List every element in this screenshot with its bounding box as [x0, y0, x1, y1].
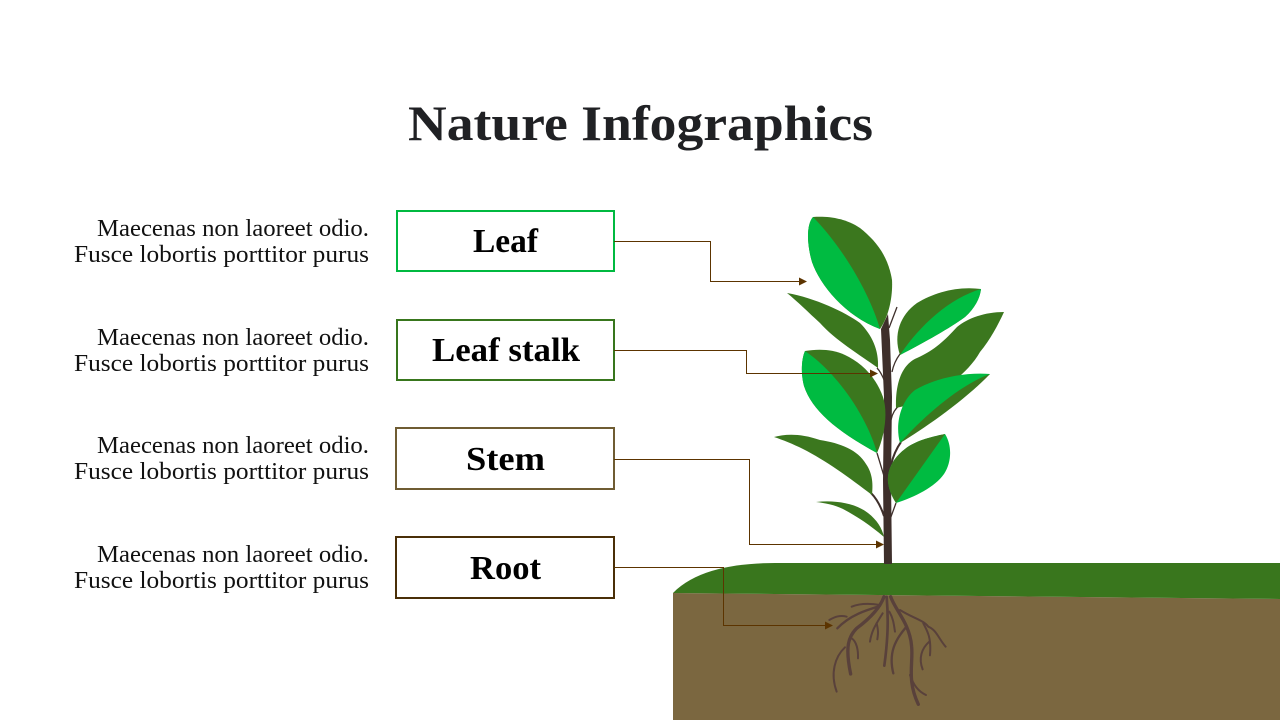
ground: soil and grass: [673, 563, 1280, 720]
text block: leaf: [74, 216, 369, 268]
leaf: middle right: [898, 374, 990, 443]
text block: root: [74, 542, 369, 594]
connector arrow: leaf stalk: [614, 350, 878, 378]
text block: stem: [74, 433, 369, 485]
leaf: middle left: [802, 350, 885, 453]
label box: root: Root: [470, 550, 542, 587]
label box: stem: Stem: [466, 441, 545, 478]
leaf: upper left dark: [787, 293, 878, 368]
text block: stem: Fusce lobortis porttitor purus: [74, 459, 369, 485]
connector arrow: root: [614, 568, 833, 630]
text block: leaf: Maecenas non laoreet odio.: [97, 216, 369, 242]
text block: stem: Maecenas non laoreet odio.: [97, 433, 369, 459]
label box: leaf stalk: [397, 320, 614, 380]
text block: leaf stalk: Fusce lobortis porttitor purus: [74, 351, 369, 377]
label box: leaf: Leaf: [473, 223, 539, 260]
label box: leaf stalk: Leaf stalk: [432, 332, 580, 369]
text block: leaf: Fusce lobortis porttitor purus: [74, 242, 369, 268]
label box: leaf: [397, 211, 614, 271]
connector arrow: stem: [614, 460, 884, 548]
text block: root: Maecenas non laoreet odio.: [97, 542, 369, 568]
leaf: lower right: [888, 434, 950, 503]
plant roots: [829, 597, 946, 704]
text block: root: Fusce lobortis porttitor purus: [74, 568, 369, 594]
plant stem and leaves: [774, 217, 1004, 564]
text block: leaf stalk: Maecenas non laoreet odio.: [97, 325, 369, 351]
label box: root: [396, 537, 614, 598]
title: Nature Infographics: [408, 95, 873, 151]
leaf: lower left dark: [774, 435, 872, 495]
text block: leaf stalk: [74, 325, 369, 377]
label box: stem: [396, 428, 614, 489]
leaf: wavy right dark: [896, 312, 1004, 408]
leaf: top: [808, 217, 892, 329]
leaf: bottom small: [816, 501, 884, 537]
leaf: upper right: [897, 288, 981, 355]
thin stalks: [871, 307, 901, 525]
connector arrow: leaf: [614, 242, 807, 286]
main stem: [881, 314, 892, 564]
